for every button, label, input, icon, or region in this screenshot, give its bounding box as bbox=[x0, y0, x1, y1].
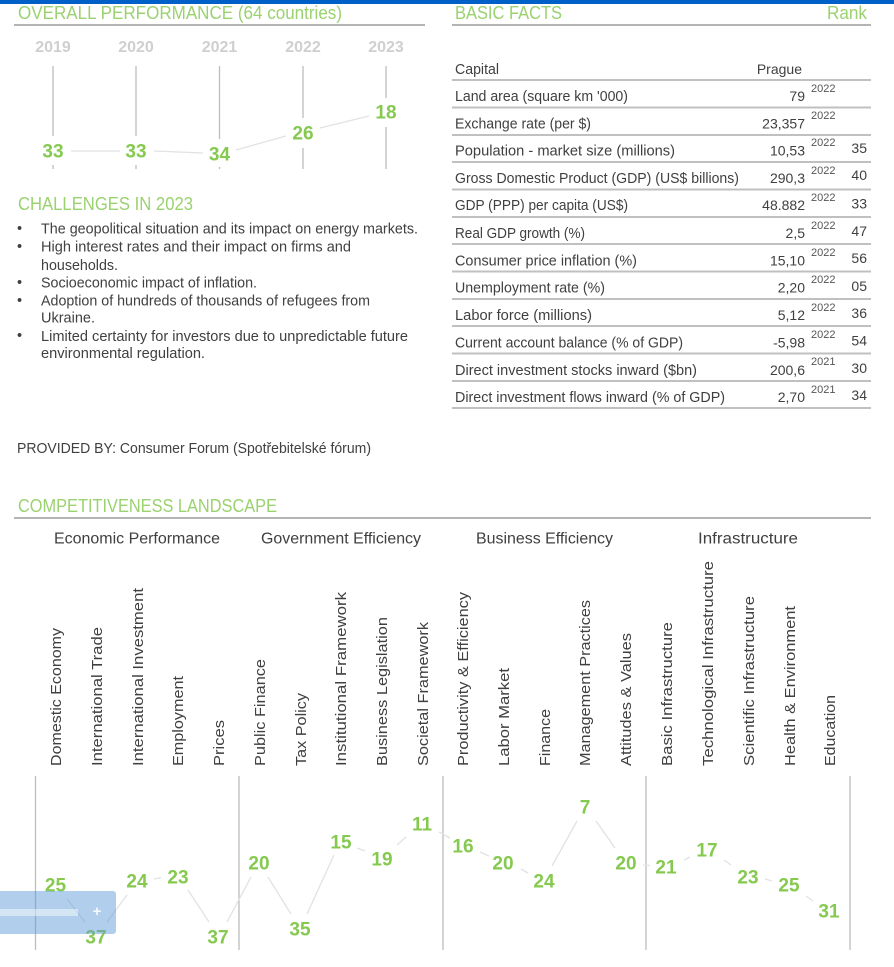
row labels: Population - market size (millions) bbox=[455, 144, 675, 160]
sub-factor labels: Tax Policy bbox=[294, 692, 310, 766]
row ranks: 30 bbox=[851, 360, 867, 376]
row reference years: 2022 bbox=[811, 247, 835, 259]
challenges list: High interest rates and their impact on firms and bbox=[41, 240, 351, 256]
ranking connectors bbox=[67, 821, 813, 922]
row reference years: 2022 bbox=[811, 137, 835, 149]
challenges list: Ukraine. bbox=[41, 310, 95, 326]
row values: 79 bbox=[789, 88, 805, 104]
ranking values: 37 bbox=[207, 928, 229, 948]
sub-factor labels: Institutional Framework bbox=[334, 591, 350, 766]
year labels: 2019 bbox=[35, 39, 71, 56]
row values bbox=[757, 61, 805, 405]
row labels: Land area (square km '000) bbox=[455, 89, 628, 105]
challenges list: • bbox=[17, 221, 22, 237]
factor separators bbox=[36, 776, 850, 950]
row labels: Direct investment flows inward (% of GDP) bbox=[455, 390, 725, 406]
row reference years: 2022 bbox=[811, 110, 835, 122]
year labels: 2023 bbox=[368, 39, 404, 56]
row ranks bbox=[851, 140, 867, 403]
sub-factor labels: Education bbox=[823, 695, 839, 766]
row ranks: 34 bbox=[851, 387, 867, 403]
heading: challenges: CHALLENGES IN 2023 bbox=[18, 194, 193, 214]
ranking values: 31 bbox=[818, 902, 840, 922]
factor headings: Economic Performance bbox=[54, 530, 220, 548]
sub-factor labels: Domestic Economy bbox=[49, 627, 65, 766]
row ranks: 36 bbox=[851, 305, 867, 321]
row reference years: 2021 bbox=[811, 384, 835, 396]
ranking values: 25 bbox=[45, 876, 66, 896]
year labels: 2021 bbox=[202, 39, 237, 56]
row values: Prague bbox=[757, 61, 802, 77]
row values: 5,12 bbox=[778, 307, 805, 323]
year labels: 2022 bbox=[285, 39, 321, 56]
sub-factor labels: Employment bbox=[171, 676, 187, 766]
rank values: 34 bbox=[209, 144, 230, 166]
row values: 23,357 bbox=[762, 116, 805, 132]
top blue bar bbox=[0, 0, 894, 4]
sub-factor labels: Business Legislation bbox=[375, 617, 391, 766]
factor headings bbox=[54, 530, 798, 548]
challenges list: The geopolitical situation and its impact on energy markets. bbox=[41, 222, 418, 238]
ranking values: 24 bbox=[533, 872, 555, 892]
rank values bbox=[42, 102, 397, 166]
row labels: Gross Domestic Product (GDP) (US$ billions) bbox=[455, 171, 739, 187]
year labels bbox=[35, 39, 404, 56]
row values: 200,6 bbox=[770, 362, 805, 378]
year axis lines bbox=[53, 66, 386, 169]
ranking values: 25 bbox=[778, 876, 800, 896]
sub-factor labels: Management Practices bbox=[578, 600, 594, 766]
row values: 48.882 bbox=[762, 197, 805, 213]
factor headings: Infrastructure bbox=[698, 530, 798, 548]
row values: 2,70 bbox=[778, 389, 805, 405]
ranking values: 20 bbox=[615, 854, 637, 874]
row labels bbox=[455, 62, 739, 406]
panel: challenges bbox=[17, 194, 418, 362]
sub-factor labels: Basic Infrastructure bbox=[660, 622, 676, 766]
row values: 10,53 bbox=[770, 142, 805, 158]
challenges list: Socioeconomic impact of inflation. bbox=[41, 276, 257, 292]
sub-factor labels: Public Finance bbox=[253, 659, 269, 766]
sub-factor labels: Societal Framework bbox=[416, 621, 432, 766]
row reference years: 2022 bbox=[811, 220, 835, 232]
row ranks: 05 bbox=[851, 278, 867, 294]
challenges list bbox=[17, 221, 418, 362]
challenges list: environmental regulation. bbox=[41, 346, 205, 362]
panel: competitiveness landscape bbox=[14, 496, 871, 950]
row ranks: 33 bbox=[851, 196, 867, 212]
challenges list: Limited certainty for investors due to unpredictable future bbox=[41, 329, 408, 345]
rank values: 18 bbox=[375, 102, 397, 124]
heading: rank: Rank bbox=[827, 3, 868, 23]
row labels: Direct investment stocks inward ($bn) bbox=[455, 363, 697, 379]
factor headings: Business Efficiency bbox=[476, 530, 613, 548]
ranking values: 37 bbox=[85, 928, 107, 948]
sub-factor labels: International Trade bbox=[90, 627, 106, 766]
row values: 290,3 bbox=[770, 170, 805, 186]
row labels: Labor force (millions) bbox=[455, 308, 592, 324]
row reference years: 2021 bbox=[811, 356, 835, 368]
ranking values: 17 bbox=[696, 840, 718, 862]
ranking values: 20 bbox=[492, 854, 514, 874]
challenges list: • bbox=[17, 293, 22, 309]
row values: 2,5 bbox=[786, 225, 805, 241]
row reference years: 2022 bbox=[811, 329, 835, 341]
ranking values: 19 bbox=[371, 850, 393, 870]
sub-factor labels bbox=[49, 561, 839, 766]
provided by note: PROVIDED BY: Consumer Forum (Spotřebitelské fórum) bbox=[17, 441, 371, 457]
table rules bbox=[452, 80, 871, 408]
row ranks: 56 bbox=[851, 250, 867, 266]
row labels: GDP (PPP) per capita (US$) bbox=[455, 198, 628, 214]
sub-factor labels: Prices bbox=[212, 720, 228, 766]
rank values: 33 bbox=[42, 142, 64, 162]
year labels: 2020 bbox=[118, 39, 154, 56]
ranking values: 23 bbox=[737, 868, 759, 888]
ranking values: 15 bbox=[330, 832, 352, 854]
factor headings: Government Efficiency bbox=[261, 530, 421, 548]
challenges list: • bbox=[17, 328, 22, 344]
challenges list: Adoption of hundreds of thousands of refugees from bbox=[41, 294, 370, 310]
row labels: Current account balance (% of GDP) bbox=[455, 336, 683, 352]
rank values: 26 bbox=[292, 124, 314, 144]
trend connectors bbox=[71, 116, 369, 153]
row labels: Exchange rate (per $) bbox=[455, 116, 591, 132]
overlay widget: translucent blue zoom control: + bbox=[93, 903, 102, 920]
panel: basic facts bbox=[452, 3, 871, 408]
heading: overall performance: OVERALL PERFORMANCE (64 countries) bbox=[18, 3, 342, 23]
row ranks: 54 bbox=[851, 332, 867, 348]
sub-factor labels: International Investment bbox=[131, 588, 147, 766]
sub-factor labels: Labor Market bbox=[497, 668, 513, 766]
ranking values: 23 bbox=[167, 868, 189, 888]
ranking values: 7 bbox=[580, 798, 590, 818]
row reference years: 2022 bbox=[811, 83, 835, 95]
row ranks: 47 bbox=[851, 223, 867, 239]
panel: overall performance bbox=[14, 3, 425, 169]
sub-factor labels: Finance bbox=[538, 709, 554, 766]
ranking values: 21 bbox=[655, 858, 677, 878]
sub-factor labels: Scientific Infrastructure bbox=[742, 596, 758, 766]
row labels: Unemployment rate (%) bbox=[455, 280, 605, 296]
row labels: Real GDP growth (%) bbox=[455, 226, 585, 242]
challenges list: households. bbox=[41, 258, 118, 274]
row values: 15,10 bbox=[770, 252, 805, 268]
row values: -5,98 bbox=[773, 334, 805, 350]
row values: 2,20 bbox=[778, 280, 805, 296]
ranking values: 11 bbox=[412, 814, 432, 836]
sub-factor labels: Technological Infrastructure bbox=[701, 561, 717, 766]
sub-factor labels: Health & Environment bbox=[783, 606, 799, 766]
row labels: Consumer price inflation (%) bbox=[455, 254, 637, 270]
overlay widget: translucent blue zoom control bbox=[0, 891, 116, 934]
challenges list: • bbox=[17, 239, 22, 255]
ranking values bbox=[45, 798, 840, 948]
ranking values: 20 bbox=[248, 854, 270, 874]
ranking values: 24 bbox=[126, 872, 148, 892]
row ranks: 40 bbox=[851, 167, 867, 183]
row reference years: 2022 bbox=[811, 302, 835, 314]
row labels: Capital bbox=[455, 62, 499, 78]
heading: basic facts: BASIC FACTS bbox=[455, 3, 562, 23]
row reference years: 2022 bbox=[811, 192, 835, 204]
row reference years bbox=[811, 83, 835, 396]
row ranks: 35 bbox=[851, 140, 867, 156]
row reference years: 2022 bbox=[811, 274, 835, 286]
ranking values: 16 bbox=[452, 836, 474, 858]
ranking values: 35 bbox=[289, 920, 311, 940]
rank values: 33 bbox=[125, 142, 147, 162]
sub-factor labels: Attitudes & Values bbox=[619, 633, 635, 766]
challenges list: • bbox=[17, 275, 22, 291]
sub-factor labels: Productivity & Efficiency bbox=[456, 591, 472, 766]
row reference years: 2022 bbox=[811, 165, 835, 177]
heading: competitiveness landscape: COMPETITIVENESS LANDSCAPE bbox=[18, 496, 277, 516]
